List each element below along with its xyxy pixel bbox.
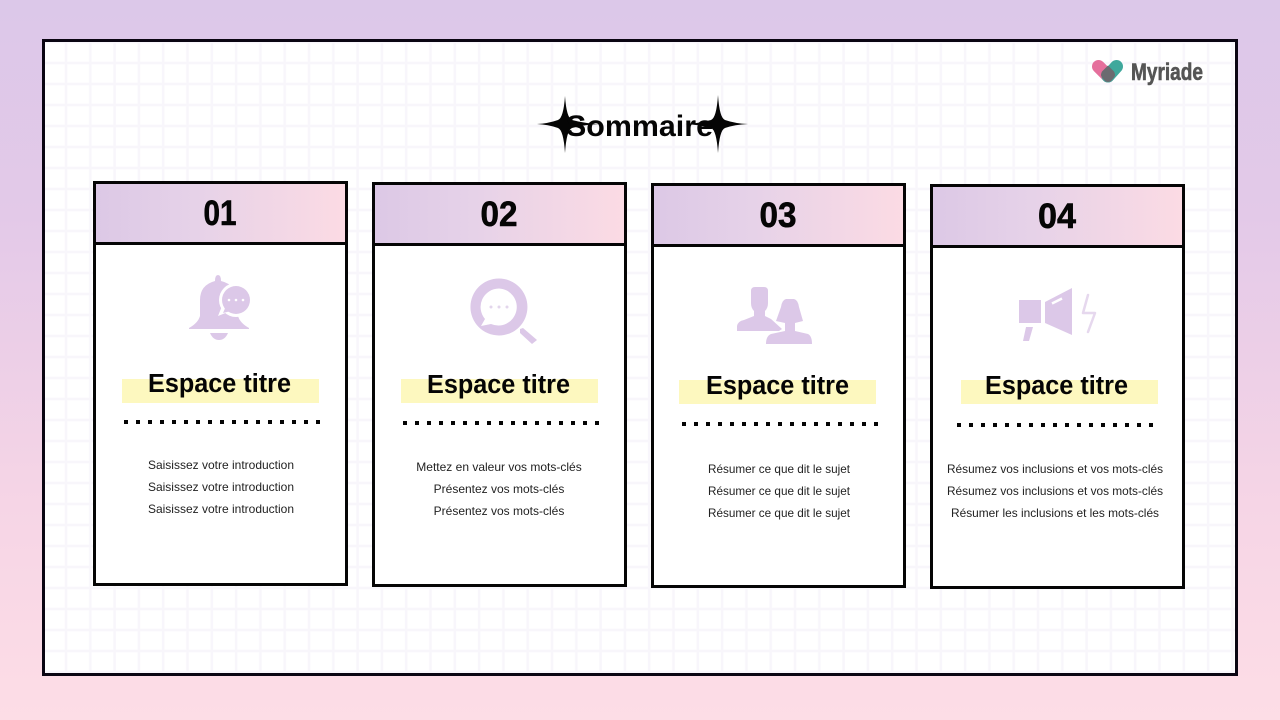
text block: sujet: Résumer ce que dit le sujet bbox=[708, 462, 851, 476]
heading: Espace titre: Espace titre bbox=[985, 372, 1128, 400]
panel: card 04 bbox=[932, 186, 1184, 588]
heading: Espace titre: Espace titre bbox=[427, 371, 570, 399]
text block: mots-clés bbox=[416, 460, 582, 518]
logo: Myriade: Myriade bbox=[1131, 59, 1203, 86]
icon: bell with chat bubble bbox=[189, 275, 253, 340]
header: 01 bbox=[94, 182, 346, 244]
header: 04 bbox=[932, 186, 1184, 246]
text block: introduction: Saisissez votre introduction bbox=[148, 502, 294, 516]
header: 01: 01 bbox=[204, 194, 236, 233]
header: 02: 02 bbox=[480, 195, 518, 234]
text block: sujet: Résumer ce que dit le sujet bbox=[708, 484, 851, 498]
text block: inclusions: Résumez vos inclusions et vos mots-clés bbox=[947, 462, 1163, 476]
heading: Espace titre bbox=[401, 371, 598, 403]
text block: inclusions: Résumer les inclusions et les mots-clés bbox=[951, 506, 1159, 520]
text block: mots-clés: Présentez vos mots-clés bbox=[434, 504, 564, 518]
text block: mots-clés: Présentez vos mots-clés bbox=[434, 482, 564, 496]
text block: introduction bbox=[148, 458, 294, 516]
heading: Espace titre: Espace titre bbox=[706, 372, 849, 400]
panel: card 02 bbox=[374, 184, 626, 586]
logo: Myriade bbox=[1098, 59, 1203, 86]
title: Sommaire with sparkles bbox=[537, 95, 748, 153]
text block: introduction: Saisissez votre introduction bbox=[148, 458, 294, 472]
text block: sujet bbox=[708, 462, 851, 520]
text block: inclusions bbox=[947, 462, 1163, 520]
icon: two people bbox=[737, 287, 812, 344]
icon: magnifier with chat bubble bbox=[470, 278, 537, 344]
panel: card 03 bbox=[652, 184, 904, 586]
dotted divider bbox=[682, 422, 880, 426]
title: Sommaire with sparkles: Sommaire bbox=[566, 110, 713, 143]
heading: Espace titre bbox=[961, 372, 1158, 404]
header: 03: 03 bbox=[760, 196, 796, 235]
header: 03 bbox=[652, 184, 904, 246]
heading: Espace titre bbox=[679, 372, 876, 404]
text block: sujet: Résumer ce que dit le sujet bbox=[708, 506, 851, 520]
panel: card 01 bbox=[94, 182, 346, 584]
text block: introduction: Saisissez votre introduction bbox=[148, 480, 294, 494]
text block: inclusions: Résumez vos inclusions et vos mots-clés bbox=[947, 484, 1163, 498]
dotted divider bbox=[124, 420, 322, 424]
header: 04: 04 bbox=[1038, 197, 1077, 236]
heading: Espace titre bbox=[122, 370, 319, 403]
icon: megaphone bbox=[1019, 288, 1095, 341]
text block: mots-clés: Mettez en valeur vos mots-clés bbox=[416, 460, 582, 474]
heading: Espace titre: Espace titre bbox=[148, 370, 291, 398]
header: 02 bbox=[374, 184, 626, 244]
dotted divider bbox=[403, 421, 601, 425]
dotted divider bbox=[957, 423, 1155, 427]
